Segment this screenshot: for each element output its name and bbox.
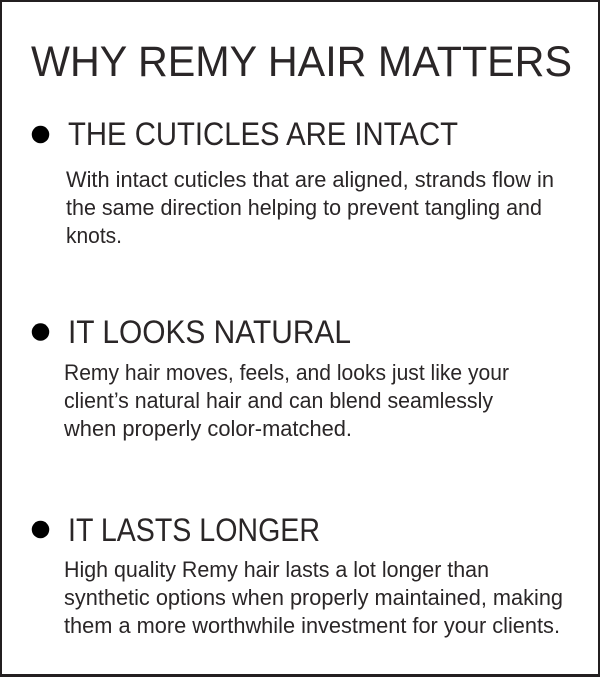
text block: longer [64,557,563,638]
heading: natural: IT LOOKS NATURAL [68,314,351,350]
text block: natural: when properly color-matched. [63,416,352,441]
heading: longer: IT LASTS LONGER [68,512,320,548]
text block: cuticles: With intact cuticles that are aligned, strands flow in [66,167,554,192]
panel: looks natural [32,314,509,441]
text block: longer: them a more worthwhile investment for your clients. [64,613,560,638]
heading: cuticles: THE CUTICLES ARE INTACT [68,116,458,152]
text block: cuticles: knots. [66,223,122,248]
text block: cuticles [66,167,554,248]
panel: lasts longer [32,512,563,638]
panel: cuticles intact [32,116,554,248]
icon: bullet [32,521,49,538]
icon: bullet [32,126,49,143]
text block: longer: High quality Remy hair lasts a lot longer than [64,557,489,582]
text block: longer: synthetic options when properly maintained, making [64,585,563,610]
text block: natural: client’s natural hair and can blend seamlessly [64,388,493,413]
icon: bullet [32,323,49,341]
text block: natural: Remy hair moves, feels, and looks just like your [64,360,509,385]
text block: cuticles: the same direction helping to prevent tangling and [66,195,542,220]
text block: natural [63,360,509,441]
title: WHY REMY HAIR MATTERS [31,38,572,86]
